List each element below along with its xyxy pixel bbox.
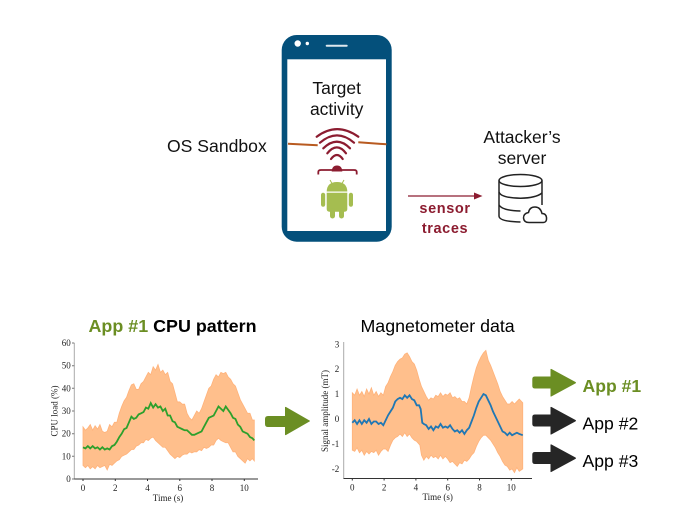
y axis tick labels: -2 bbox=[332, 464, 339, 474]
x axis tick labels: 2 bbox=[382, 483, 386, 493]
y axis tick labels: 0 bbox=[335, 414, 340, 424]
arrow: sensor traces to server bbox=[408, 192, 482, 200]
label: App #3: App #3 bbox=[582, 451, 638, 471]
y axis tick labels: 3 bbox=[335, 339, 340, 349]
icon: database with cloud bbox=[499, 174, 547, 222]
y axis tick labels: -1 bbox=[332, 439, 339, 449]
arrow: result app 2 bbox=[532, 407, 576, 435]
text: sensor traces: sensor bbox=[419, 201, 471, 217]
icon: sensor dome and bracket bbox=[318, 166, 357, 174]
mean line bbox=[352, 394, 523, 435]
text: target activity: activity bbox=[310, 99, 364, 119]
x axis tick labels: 8 bbox=[210, 483, 215, 493]
phone speaker bbox=[326, 45, 348, 47]
y axis tick labels: 2 bbox=[335, 364, 339, 374]
text: attacker's server: Attacker’s bbox=[483, 127, 561, 147]
label: App #1: App #1 bbox=[582, 376, 641, 396]
heading: App #1 CPU pattern: App #1 CPU pattern bbox=[88, 316, 257, 336]
chart: CPU load bbox=[50, 338, 258, 503]
chart axes bbox=[344, 342, 532, 480]
x axis tick labels: 6 bbox=[178, 483, 183, 493]
arrow: result app 3 bbox=[532, 444, 576, 472]
y axis tick labels: 0 bbox=[66, 474, 71, 484]
phone camera dots bbox=[294, 40, 309, 47]
x axis tick labels: 10 bbox=[240, 483, 249, 493]
y axis tick labels: 10 bbox=[62, 451, 71, 461]
x axis tick labels: 0 bbox=[81, 483, 86, 493]
x axis tick labels: 10 bbox=[507, 483, 516, 493]
y axis tick labels: 50 bbox=[62, 361, 71, 371]
text: target activity: Target bbox=[312, 78, 361, 98]
x axis tick labels: 6 bbox=[445, 483, 450, 493]
y axis tick labels: 30 bbox=[62, 406, 71, 416]
x axis tick labels: 4 bbox=[145, 483, 150, 493]
arrow: result app 1 bbox=[532, 369, 576, 397]
chart axes bbox=[72, 343, 258, 481]
label: OS Sandbox: OS Sandbox bbox=[167, 136, 267, 156]
icon: android robot bbox=[321, 180, 353, 218]
x axis label: Time (s) bbox=[153, 493, 183, 503]
x axis tick labels: 0 bbox=[350, 483, 355, 493]
text: sensor traces: traces bbox=[422, 221, 468, 237]
arrow: CPU pattern to magnetometer bbox=[265, 407, 310, 435]
phone body bbox=[282, 35, 392, 242]
variance band bbox=[83, 365, 254, 470]
x axis tick labels: 4 bbox=[414, 483, 419, 493]
heading: Magnetometer data: Magnetometer data bbox=[360, 316, 515, 336]
phone screen bbox=[287, 59, 386, 231]
y axis tick labels: 60 bbox=[62, 338, 71, 348]
text: attacker's server: server bbox=[498, 148, 546, 168]
icon: wifi signal bbox=[317, 129, 358, 159]
x axis tick labels: 8 bbox=[477, 483, 482, 493]
y axis tick labels: 20 bbox=[62, 429, 71, 439]
mean line bbox=[83, 403, 254, 450]
variance band bbox=[352, 350, 523, 473]
y axis label: Signal amplitude (mT) bbox=[320, 370, 330, 452]
x axis tick labels: 2 bbox=[113, 483, 118, 493]
y axis tick labels: 40 bbox=[62, 383, 71, 393]
label: App #2: App #2 bbox=[582, 414, 638, 434]
x axis label: Time (s) bbox=[422, 492, 453, 502]
y axis label: CPU load (%) bbox=[50, 386, 60, 436]
sandbox wall lines bbox=[288, 142, 386, 145]
y axis tick labels: 1 bbox=[335, 389, 339, 399]
chart: magnetometer signal bbox=[320, 339, 532, 502]
phone bbox=[282, 35, 392, 242]
